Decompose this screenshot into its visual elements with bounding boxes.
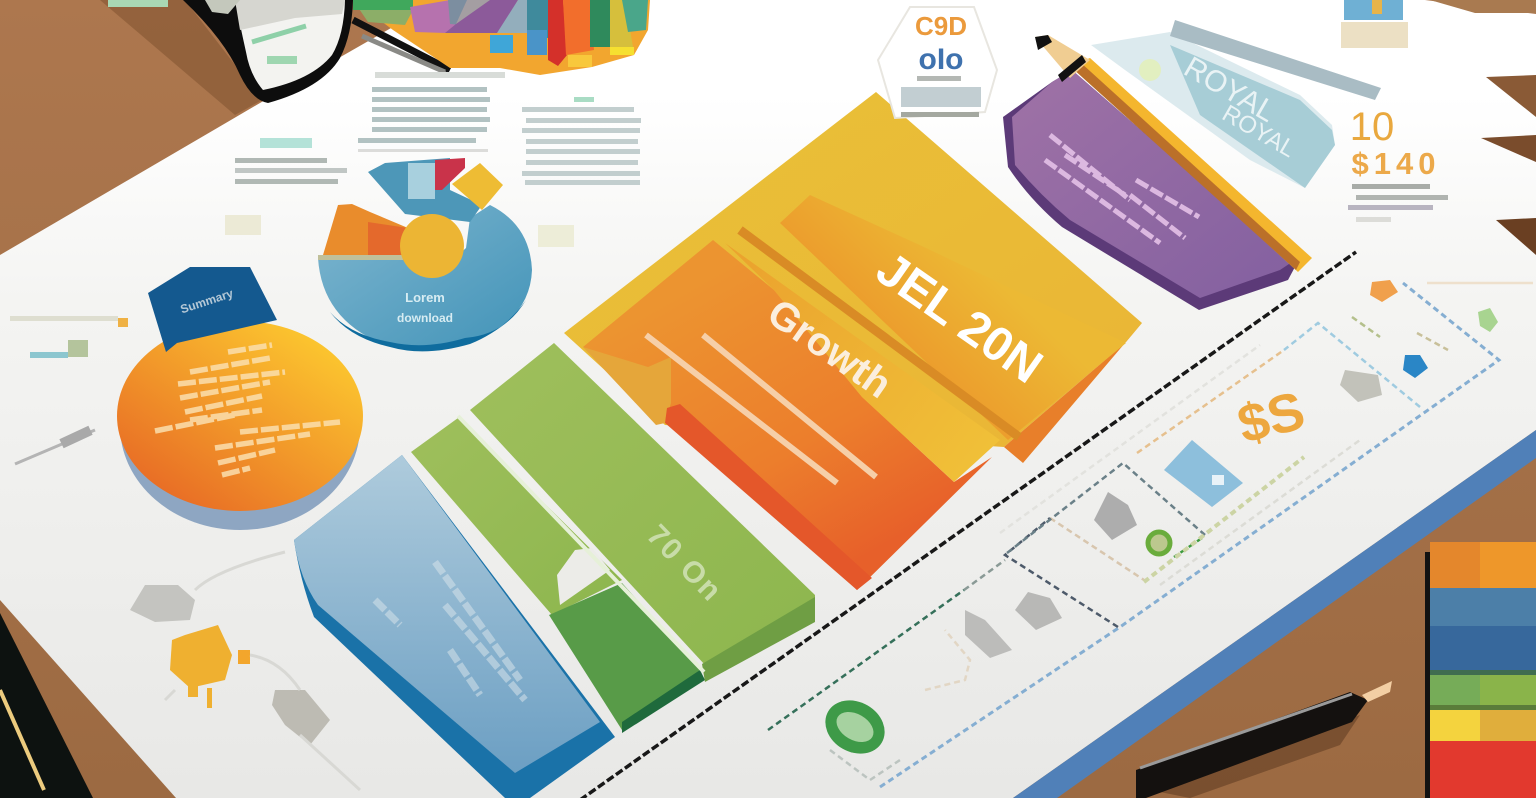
orange circle text: [155, 345, 340, 475]
green badge icon: [816, 690, 894, 764]
process diagram: [768, 283, 1533, 787]
numbers callout right: 10: [1350, 105, 1394, 149]
yellow splash icon: [170, 625, 250, 708]
green segment heading: 70 On: [640, 519, 729, 609]
light blue card: [1091, 20, 1381, 188]
yellow pencil: [1035, 35, 1312, 272]
small caption top left: [235, 138, 347, 184]
grey icon one: [1094, 492, 1137, 540]
glasses: [108, 0, 450, 103]
green left segment: [411, 418, 705, 733]
grey icon three: [965, 610, 1012, 658]
green right segment: [458, 343, 815, 682]
yellow strip: [725, 243, 1000, 482]
light blue card: ROYAL: [1178, 51, 1281, 129]
text block top right: [522, 97, 641, 185]
left callout lines: [10, 316, 128, 464]
numbers callout right: [1348, 105, 1448, 222]
stack of colour swatches: [1425, 542, 1536, 798]
framed photo top right: [1341, 0, 1408, 48]
grey icon upper: [130, 585, 195, 622]
beige note right: [538, 225, 574, 247]
beige note left: [225, 215, 261, 235]
light blue card: ROYAL: [1218, 100, 1300, 163]
hexagon badge: C9D: [915, 11, 967, 41]
purple panel text: [1045, 135, 1199, 243]
yellow block heading: JEL 20N: [867, 242, 1052, 394]
pie chart: [318, 158, 532, 351]
orange block heading: Growth: [759, 291, 899, 407]
small orange icon: [1370, 280, 1398, 302]
blue tile icon: [1164, 440, 1243, 507]
blue tag on circle: Summary: [179, 286, 235, 316]
orange main block: [583, 230, 1052, 590]
blue paper edge: [1013, 430, 1536, 798]
fountain pen: [1136, 681, 1392, 798]
curved connector: [165, 552, 360, 790]
black object bottom left: [0, 613, 93, 798]
yellow top block: [564, 92, 1142, 463]
orange block text line one: [646, 335, 837, 483]
orange block text line two: [703, 335, 876, 477]
small green icon: [1478, 308, 1498, 332]
orange circle panel: [117, 321, 363, 530]
grey icon two: [1015, 592, 1062, 630]
book fan: [353, 0, 650, 75]
purple panel: [1003, 70, 1296, 310]
numbers callout right: $140: [1352, 146, 1440, 181]
grey icon four: [1340, 370, 1382, 402]
hexagon badge: [878, 7, 997, 118]
grey icon lower: [272, 690, 330, 745]
wood shadow by glasses: [100, 0, 262, 115]
dark fold stripe: [740, 230, 1019, 437]
blue tag on circle: [148, 267, 277, 352]
blue segment text: [375, 562, 525, 700]
black dashed divider: [580, 252, 1356, 798]
text block top centre: [358, 72, 505, 152]
blue segment: [294, 455, 615, 798]
dollar icon: $S: [1232, 380, 1311, 455]
hexagon badge: oIo: [918, 43, 964, 76]
small blue icon: [1403, 355, 1428, 378]
pie chart: download: [397, 311, 453, 325]
green ring icon: [1148, 532, 1170, 554]
pie chart: Lorem: [405, 290, 445, 305]
